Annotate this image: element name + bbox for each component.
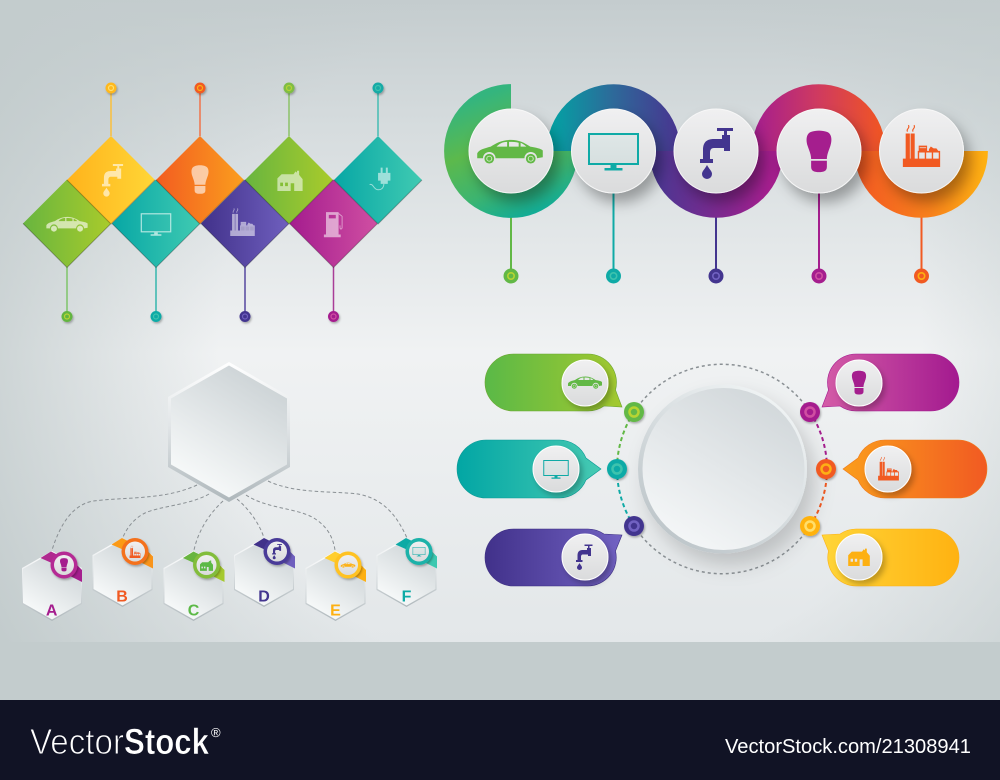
connector lines and pins bbox=[504, 190, 929, 284]
callout: tap bbox=[485, 529, 622, 586]
ribbon curve bbox=[460, 100, 972, 202]
hexagon A bbox=[22, 551, 82, 621]
connector pins top bbox=[106, 82, 384, 136]
hexagon E: E bbox=[330, 602, 341, 620]
panel: circular diagram bbox=[457, 354, 987, 586]
large hexagon bbox=[168, 362, 290, 502]
diamond: pump bbox=[290, 180, 378, 268]
hexagon C bbox=[164, 551, 224, 621]
diamond: house bbox=[245, 136, 333, 224]
callout: car bbox=[485, 354, 622, 411]
icon: plug bbox=[370, 168, 390, 190]
panel: hexagon tree bbox=[22, 362, 437, 621]
diamond: factory bbox=[201, 180, 289, 268]
hexagon A: A bbox=[46, 602, 58, 620]
panel: ribbon timeline bbox=[460, 100, 972, 283]
hexagon B bbox=[92, 538, 153, 607]
icon: bulb bbox=[191, 165, 209, 194]
callout: tv bbox=[457, 440, 601, 498]
circle: bulb bbox=[777, 109, 861, 193]
icon: factory bbox=[230, 208, 255, 236]
connector pins bottom bbox=[62, 267, 339, 322]
circle: tv bbox=[572, 109, 656, 193]
icon: pump bbox=[324, 212, 342, 237]
dashed ring bbox=[617, 364, 827, 574]
registered mark: ® bbox=[211, 725, 221, 740]
callout: factory bbox=[843, 440, 987, 498]
dashed connectors bbox=[52, 481, 407, 550]
hexagon F: F bbox=[402, 588, 412, 606]
icon: tap bbox=[102, 164, 123, 197]
diamond: car bbox=[23, 180, 111, 268]
circle: factory bbox=[880, 109, 964, 193]
footer bar bbox=[0, 700, 1000, 780]
diamond: tv bbox=[112, 180, 200, 268]
hexagon C: C bbox=[188, 602, 200, 620]
image id: VectorStock.com/21308941 bbox=[725, 736, 971, 758]
center circle bbox=[638, 384, 807, 554]
callout: bulb bbox=[822, 354, 959, 411]
hexagon D bbox=[234, 538, 295, 607]
hexagon D: D bbox=[258, 588, 270, 606]
icon: car bbox=[46, 217, 88, 232]
diamond: bulb bbox=[156, 136, 244, 224]
icon: tv bbox=[141, 214, 171, 236]
circle: car bbox=[469, 109, 553, 193]
hexagon B: B bbox=[116, 588, 128, 606]
hexagon F bbox=[376, 538, 437, 607]
node dots bbox=[607, 402, 836, 536]
circle: tap bbox=[674, 109, 758, 193]
diamond: tap bbox=[67, 136, 155, 224]
icon: house bbox=[277, 171, 303, 191]
logo: VectorStock bbox=[30, 721, 210, 762]
panel: diamond timeline bbox=[23, 82, 422, 322]
callout: house bbox=[822, 529, 959, 586]
diamond: plug bbox=[334, 136, 422, 224]
hexagon E bbox=[306, 551, 366, 621]
